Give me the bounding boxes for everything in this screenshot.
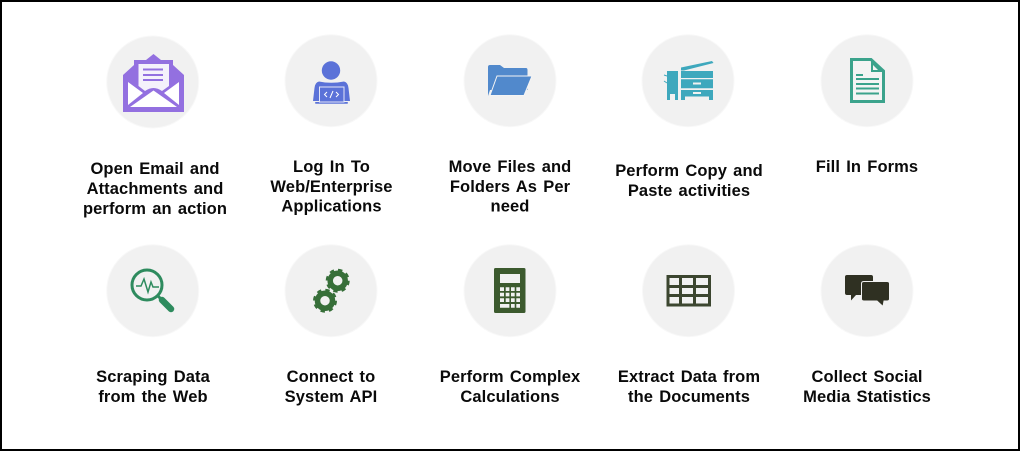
circle card: folder — [464, 35, 556, 127]
circle card: documents table — [642, 245, 734, 337]
icon: table grid — [666, 275, 711, 306]
icon: document — [852, 60, 884, 102]
label: fill in forms: Fill In Forms — [816, 158, 918, 176]
label: log in: Web/Enterprise — [270, 178, 393, 196]
circle card: social — [821, 245, 913, 337]
icon: gears — [314, 270, 348, 311]
label: scraping: from the Web — [98, 388, 208, 406]
circle card: calculator — [464, 245, 556, 337]
icon: speech bubbles — [845, 275, 890, 306]
circle card: form — [821, 35, 913, 127]
label: open email: Attachments and — [87, 180, 223, 198]
label: open email: Open Email and — [90, 160, 220, 178]
label: calculations: Calculations — [460, 388, 560, 406]
label: log in: Applications — [281, 198, 382, 216]
label: open email: perform an action — [83, 200, 227, 218]
label: calculations: Perform Complex — [440, 368, 580, 386]
icon: magnifier with pulse — [132, 270, 171, 309]
circle card: scraping — [107, 245, 199, 337]
label: social statistics: Media Statistics — [803, 388, 931, 406]
label: copy and paste: Perform Copy and — [615, 162, 763, 180]
label: move files: need — [491, 198, 529, 216]
label: scraping: Scraping Data — [96, 368, 210, 386]
label: extract data: Extract Data from — [618, 368, 760, 386]
label: API: Connect to — [287, 368, 375, 386]
circle card: API — [285, 245, 377, 337]
icon: calculator — [494, 268, 526, 313]
label: move files: Folders As Per — [450, 178, 571, 196]
label: API: System API — [285, 388, 377, 406]
circle card: copier — [642, 35, 734, 127]
label: move files: Move Files and — [449, 158, 571, 176]
icon: copier — [664, 61, 714, 100]
icon: person at laptop — [313, 61, 350, 104]
icon: folder — [488, 65, 532, 96]
circle card: log in — [285, 35, 377, 127]
label: extract data: the Documents — [628, 388, 750, 406]
label: copy and paste: Paste activities — [628, 182, 750, 200]
label: social statistics: Collect Social — [811, 368, 923, 386]
icon: open envelope — [123, 54, 184, 112]
circle card: email — [107, 36, 199, 128]
label: log in: Log In To — [293, 158, 370, 176]
